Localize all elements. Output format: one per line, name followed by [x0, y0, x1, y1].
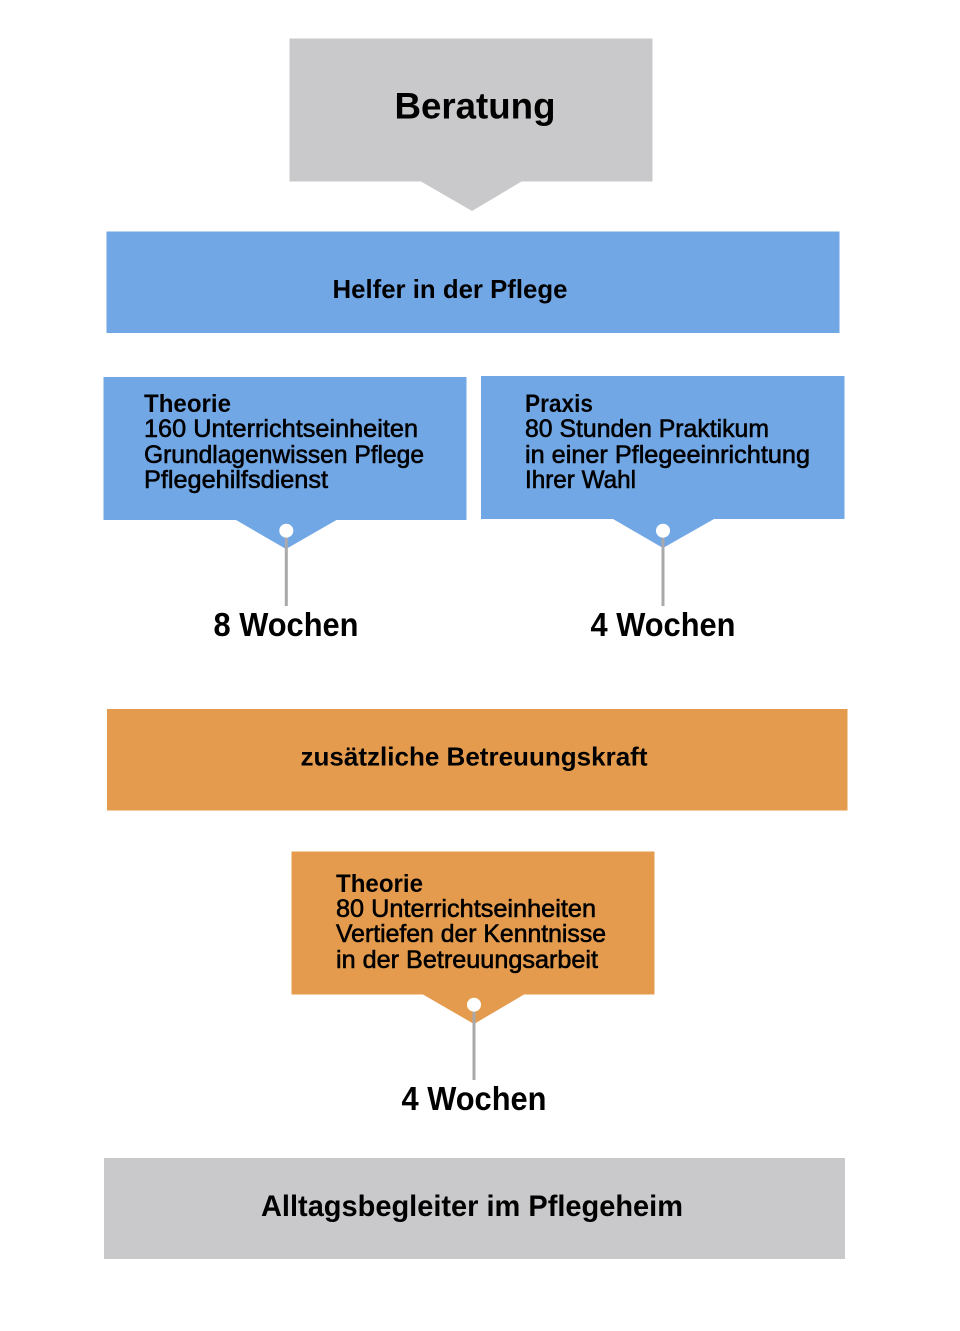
text block: Theorie [144, 390, 231, 418]
label: 8 Wochen: 8 Wochen [214, 606, 358, 643]
text block: 80 Stunden Praktikum [525, 415, 769, 443]
panel: zusätzliche Betreuungskraft [107, 709, 848, 810]
text block: 160 Unterrichtseinheiten [144, 415, 418, 443]
connector: 8 Wochen [279, 524, 293, 606]
text block: in einer Pflegeeinrichtung [525, 441, 810, 469]
text block: Grundlagenwissen Pflege [144, 441, 424, 469]
panel: Praxis Helfer [481, 376, 844, 548]
connector: 4 Wochen Praxis [656, 524, 670, 606]
connector: 4 Wochen Betreuungskraft [467, 998, 481, 1080]
label: 4 Wochen Betreuungskraft: 4 Wochen [402, 1080, 546, 1117]
label: 4 Wochen Praxis: 4 Wochen [590, 606, 736, 643]
panel: Theorie Betreuungskraft [292, 852, 654, 1024]
text block: Theorie [336, 870, 423, 898]
title: Beratung [394, 86, 556, 126]
heading: Alltagsbegleiter im Pflegeheim [261, 1190, 683, 1223]
text block [525, 390, 810, 494]
text block: 80 Unterrichtseinheiten [336, 895, 596, 923]
text block: Praxis [525, 390, 593, 418]
panel: Theorie Helfer [104, 377, 466, 549]
text block: Ihrer Wahl [525, 466, 636, 494]
text block [336, 870, 606, 974]
text block: Vertiefen der Kenntnisse [336, 920, 606, 948]
panel: Helfer in der Pflege [106, 232, 840, 333]
text block [144, 390, 424, 494]
panel: Alltagsbegleiter im Pflegeheim [104, 1158, 845, 1259]
heading: zusätzliche Betreuungskraft [300, 742, 648, 772]
text block: Pflegehilfsdienst [144, 466, 328, 494]
panel: Beratung [290, 38, 652, 211]
text block: in der Betreuungsarbeit [336, 946, 598, 974]
heading: Helfer in der Pflege [332, 274, 568, 304]
